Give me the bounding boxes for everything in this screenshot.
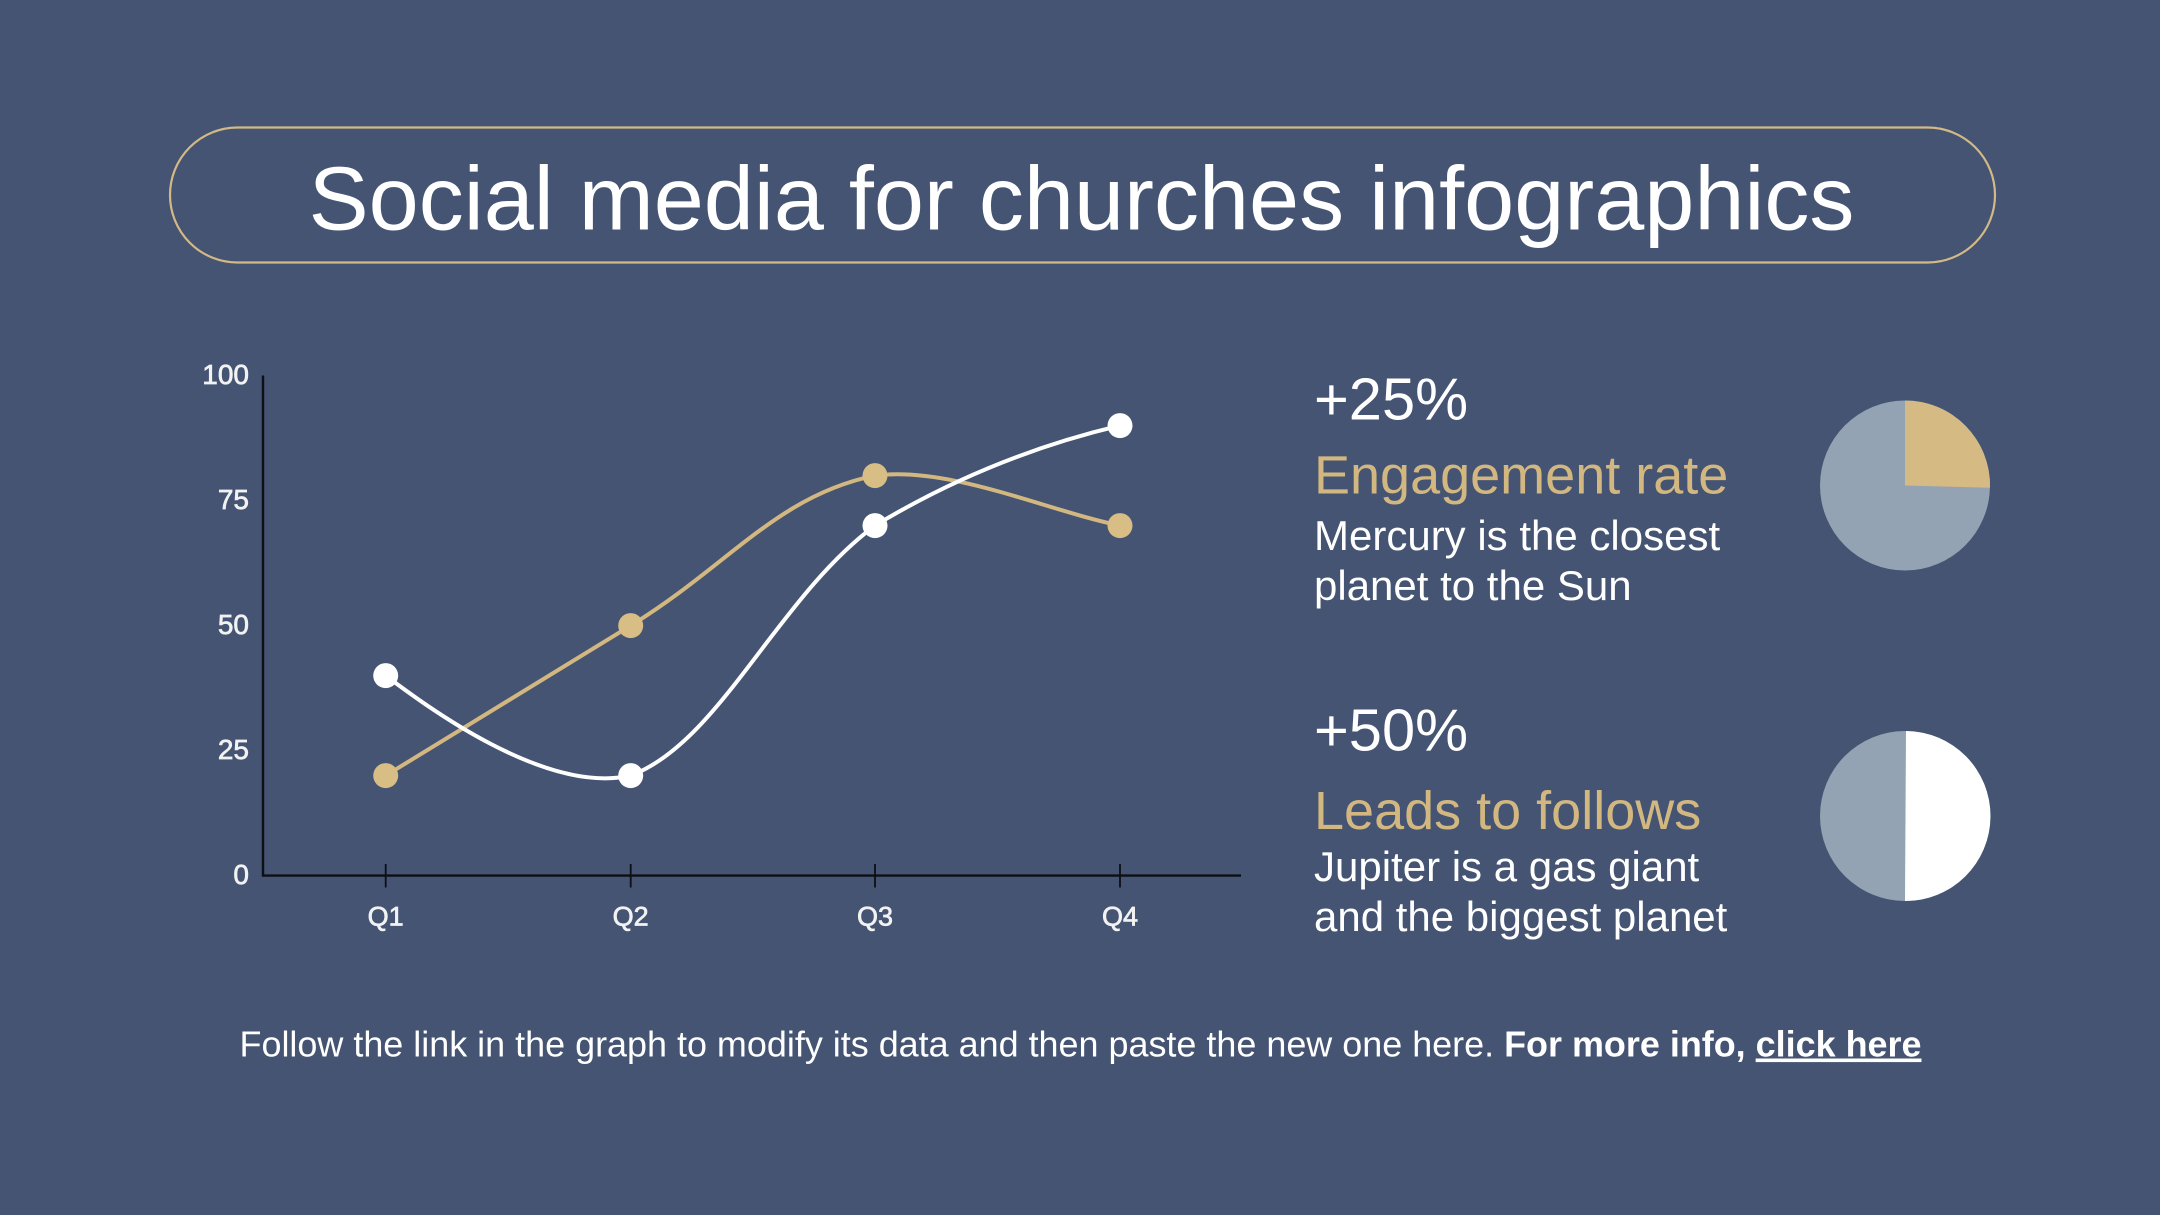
line chart bbox=[202, 359, 1241, 932]
x axis labels: Q3 bbox=[857, 902, 893, 932]
y axis labels: 100 bbox=[202, 359, 249, 390]
y axis labels: 25 bbox=[218, 734, 249, 765]
footer note: Follow the link in the graph to modify its data and then paste the new one here. For more info, click here bbox=[240, 1024, 1921, 1064]
title pill with heading bbox=[170, 128, 1995, 262]
x axis labels: Q1 bbox=[368, 902, 404, 932]
pie chart: 25 percent bbox=[1820, 400, 1990, 570]
panel: leads to follows bbox=[1314, 696, 1991, 940]
description: mercury: planet to the Sun bbox=[1314, 562, 1632, 609]
panel: engagement rate bbox=[1314, 366, 1990, 609]
y axis labels bbox=[202, 359, 249, 890]
stat: +50%: +50% bbox=[1314, 696, 1468, 764]
gold data series bbox=[373, 463, 1132, 788]
x axis labels: Q2 bbox=[613, 902, 649, 932]
x axis labels bbox=[368, 902, 1138, 932]
title: Social media for churches infographics bbox=[309, 150, 1854, 250]
white data series bbox=[373, 413, 1132, 788]
description: jupiter: Jupiter is a gas giant bbox=[1314, 843, 1700, 890]
chart axes and ticks bbox=[263, 376, 1241, 888]
heading: engagement rate: Engagement rate bbox=[1314, 446, 1728, 506]
x axis labels: Q4 bbox=[1102, 902, 1138, 932]
pie chart: 50 percent bbox=[1820, 731, 1991, 901]
stat: +25%: +25% bbox=[1314, 366, 1468, 432]
y axis labels: 0 bbox=[233, 859, 249, 890]
heading: leads to follows: Leads to follows bbox=[1314, 781, 1701, 841]
y axis labels: 75 bbox=[218, 484, 249, 515]
description: jupiter: and the biggest planet bbox=[1314, 893, 1728, 940]
y axis labels: 50 bbox=[218, 609, 249, 640]
description: mercury: Mercury is the closest bbox=[1314, 512, 1720, 559]
